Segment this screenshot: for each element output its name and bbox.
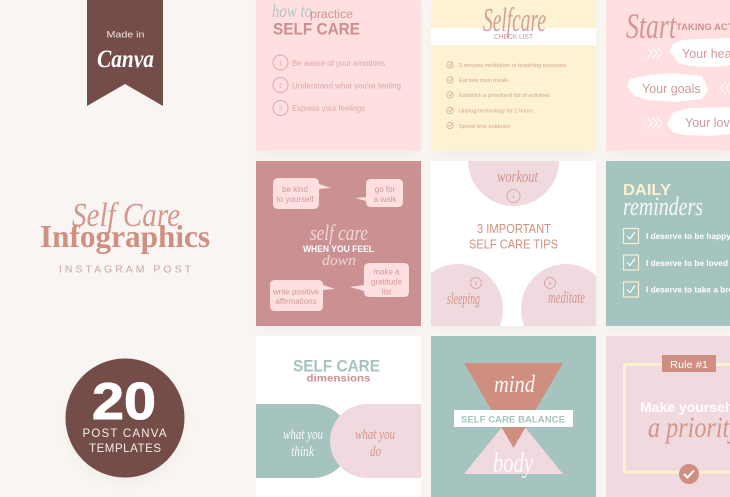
bubble: make a gratitude list: list: [382, 288, 392, 296]
list: three steps: 3: [279, 106, 283, 112]
center title: down: [322, 253, 356, 269]
title block: [40, 197, 210, 276]
checklist reminders: [624, 228, 730, 297]
brush strokes with labels: Your goals: [642, 82, 701, 96]
panel: rule #1: Rule #1: [670, 359, 708, 371]
bubble: make a gratitude list: [350, 263, 409, 297]
ribbon: made in Canva: [87, 0, 163, 106]
center title: [303, 220, 374, 269]
bubble: go for a walk: a walk: [374, 195, 397, 204]
panel: selfcare check list: CHECK LIST: [494, 32, 533, 41]
pink shape: what you do: [330, 404, 421, 478]
list: three steps: [273, 55, 401, 116]
panel: self care dimensions: dimensions: [306, 372, 371, 384]
checklist items: Eat tree main meals: [459, 78, 508, 84]
panel: daily reminders: [606, 161, 730, 326]
teal shape: what you think: [256, 404, 350, 478]
icon: check circle: [679, 464, 699, 484]
panel: 3 important self care tips: 3: [549, 281, 552, 286]
checklist items: 3 minutes meditation or breathing exercises: [459, 63, 566, 69]
badge: 20 post Canva templates: 20: [92, 373, 156, 431]
panel: 3 important self care tips: SELF CARE TIPS: [469, 236, 558, 252]
checklist reminders: I deserve to be loved: [646, 258, 728, 268]
bubble: be kind to yourself: to yourself: [277, 195, 314, 204]
bubble: write positive affirmations: write positive: [272, 288, 320, 296]
pink shape: what you do: do: [370, 444, 381, 460]
panel: self care dimensions: [256, 336, 421, 497]
chevrons: [647, 47, 730, 129]
panel: selfcare check list: [431, 0, 596, 151]
panel: self care balance: mind: [494, 372, 536, 398]
list: three steps: Understand what you're feeling: [292, 80, 401, 90]
bubble: write positive affirmations: affirmations: [275, 297, 317, 306]
panel: self care dimensions: SELF CARE: [293, 356, 380, 376]
bubble: go for a walk: [355, 179, 403, 207]
checklist items: Spend time outdoors: [459, 124, 510, 130]
bubble: make a gratitude list: make a: [373, 268, 400, 276]
bubble: be kind to yourself: be kind: [282, 185, 308, 194]
title block: Infographics: [40, 218, 210, 254]
panel: daily reminders: DAILY: [623, 182, 672, 199]
panel: start taking action: [606, 0, 730, 151]
list: three steps: Be aware of your emotions: [292, 58, 385, 68]
title block: Self Care: [72, 197, 180, 234]
teal shape: what you think: think: [291, 444, 314, 460]
ribbon: made in Canva: Canva: [97, 46, 154, 73]
checklist items: Unplug technology for 2 hours: [459, 108, 533, 114]
center title: WHEN YOU FEEL: [303, 244, 374, 254]
panel: self care when you feel down: [256, 161, 421, 326]
checklist items: Establish a prioritized list of activities: [459, 93, 550, 99]
list: three steps: 1: [279, 61, 283, 67]
bubble: go for a walk: go for: [375, 185, 396, 194]
panel: 3 important self care tips: [431, 161, 596, 326]
bubble: make a gratitude list: gratitude: [371, 278, 403, 286]
pink shape: what you do: what you: [355, 427, 395, 443]
panel: self care balance: SELF CARE BALANCE: [461, 414, 565, 426]
panel: selfcare check list: Selfcare: [483, 2, 546, 39]
panel: 3 important self care tips: meditate: [548, 288, 585, 307]
teal shape: what you think: what you: [283, 427, 323, 443]
panel: how to practice self care: how to: [272, 1, 312, 21]
panel: how to practice self care: [256, 0, 421, 151]
checklist items: [447, 62, 566, 130]
panel: 3 important self care tips: 1: [512, 194, 515, 199]
bubble: write positive affirmations: [270, 280, 335, 311]
panel: 3 important self care tips: sleeping: [447, 289, 480, 308]
panel: daily reminders: reminders: [623, 192, 703, 221]
panel: how to practice self care: practice: [310, 9, 353, 21]
center title: self care: [310, 220, 368, 245]
ribbon: made in Canva: Made in: [106, 30, 144, 40]
panel: 3 important self care tips: workout: [497, 167, 539, 186]
panel: self care balance: body: [493, 448, 533, 479]
title block: INSTAGRAM POST: [59, 264, 192, 276]
panel: how to practice self care: SELF CARE: [273, 20, 360, 38]
brush strokes with labels: [627, 38, 730, 136]
panel: 3 important self care tips: 3 IMPORTANT: [477, 221, 551, 236]
checklist reminders: I deserve to be happy: [646, 231, 730, 241]
panel: self care balance: [431, 336, 596, 497]
bubble: be kind to yourself: [273, 178, 331, 209]
list: three steps: 2: [279, 84, 283, 90]
list: three steps: Express your feelings: [292, 103, 365, 113]
badge: 20 post Canva templates: [66, 358, 184, 478]
panel: 3 important self care tips: 2: [475, 281, 478, 286]
panel: start taking action: Start: [626, 6, 677, 46]
panel: rule #1: [606, 336, 730, 497]
badge: 20 post Canva templates: POST CANVA: [82, 428, 167, 440]
badge: 20 post Canva templates: TEMPLATES: [89, 443, 161, 455]
